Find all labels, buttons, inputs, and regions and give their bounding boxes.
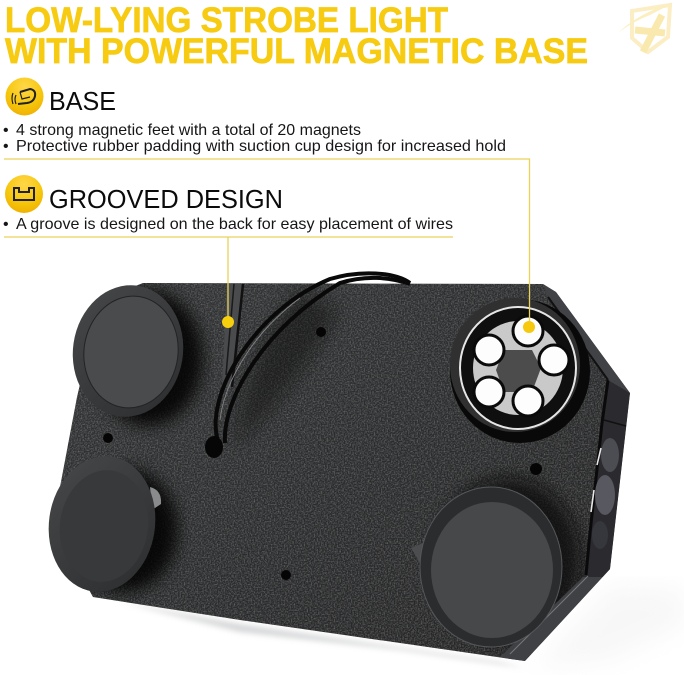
screw holes — [103, 327, 542, 580]
callout dot: groove — [222, 316, 234, 328]
bottom chamfer strip — [500, 577, 607, 662]
magnet ring — [450, 298, 590, 443]
title — [5, 1, 588, 71]
heading: grooved design: GROOVED DESIGN — [49, 184, 283, 214]
text block: base bullets: • — [3, 122, 9, 139]
top chamfer strip — [543, 284, 630, 393]
leader line: base — [4, 159, 530, 326]
text block: groove bullet: • — [3, 216, 9, 233]
side panel — [500, 284, 630, 662]
cable hole — [205, 436, 223, 458]
magnetic foot: bottom right — [411, 487, 562, 647]
callout dot: magnet — [523, 321, 535, 333]
groove channel — [222, 284, 243, 387]
text block: base bullets: • — [3, 138, 9, 155]
text block: base bullets: Protective rubber padding with suction cup design for increased hold — [16, 138, 506, 155]
magnets — [474, 316, 569, 416]
logo watermark — [618, 3, 673, 52]
leader line: groove — [4, 237, 453, 322]
shadows under feet — [93, 290, 203, 426]
strobe light body — [40, 275, 640, 670]
text block: base bullets: 4 strong magnetic feet with a total of 20 magnets — [16, 122, 361, 139]
title: LOW-LYING STROBE LIGHT — [5, 1, 448, 40]
text block: groove bullet: A groove is designed on the back for easy placement of wires — [16, 216, 453, 233]
icon: groove — [5, 175, 43, 213]
magnetic foot: lower left — [40, 449, 164, 599]
title: WITH POWERFUL MAGNETIC BASE — [5, 32, 588, 71]
wire — [216, 273, 410, 443]
heading: base: BASE — [49, 86, 116, 116]
icon: magnet — [6, 78, 44, 116]
magnetic foot: top left — [64, 278, 192, 424]
text block: base bullets — [3, 122, 506, 155]
floor shadow — [120, 585, 684, 668]
